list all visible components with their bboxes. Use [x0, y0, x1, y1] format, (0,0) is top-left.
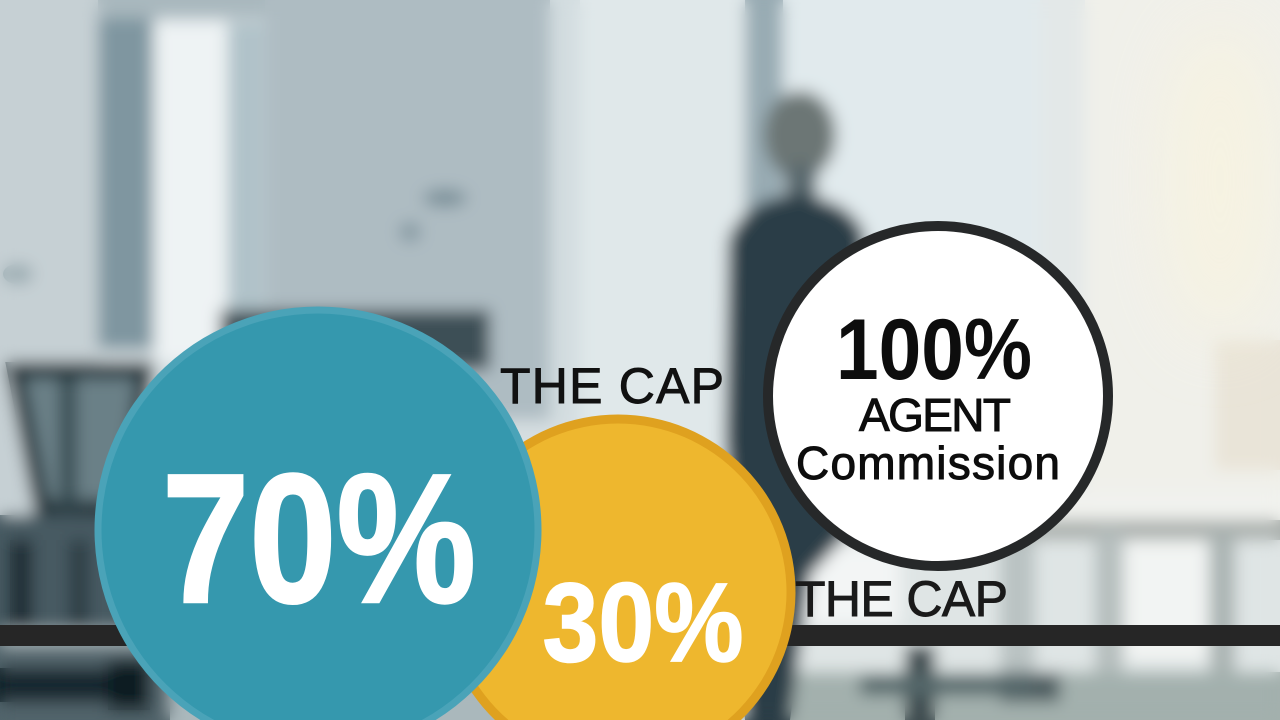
the cap line — [0, 625, 1280, 646]
white circle: 100% agent commission: 100% — [836, 302, 1032, 398]
yellow circle: 30% — [440, 415, 796, 720]
white circle: 100% agent commission: Commission — [796, 437, 1060, 489]
teal circle: 70% — [95, 307, 542, 720]
label: the cap lower: THE CAP — [795, 571, 1008, 627]
label: the cap upper: THE CAP — [500, 358, 724, 414]
yellow circle: 30%: 30% — [542, 560, 744, 685]
white circle: 100% agent commission — [768, 226, 1108, 566]
white circle: 100% agent commission: AGENT — [859, 389, 1011, 441]
teal circle: 70%: 70% — [162, 435, 476, 641]
